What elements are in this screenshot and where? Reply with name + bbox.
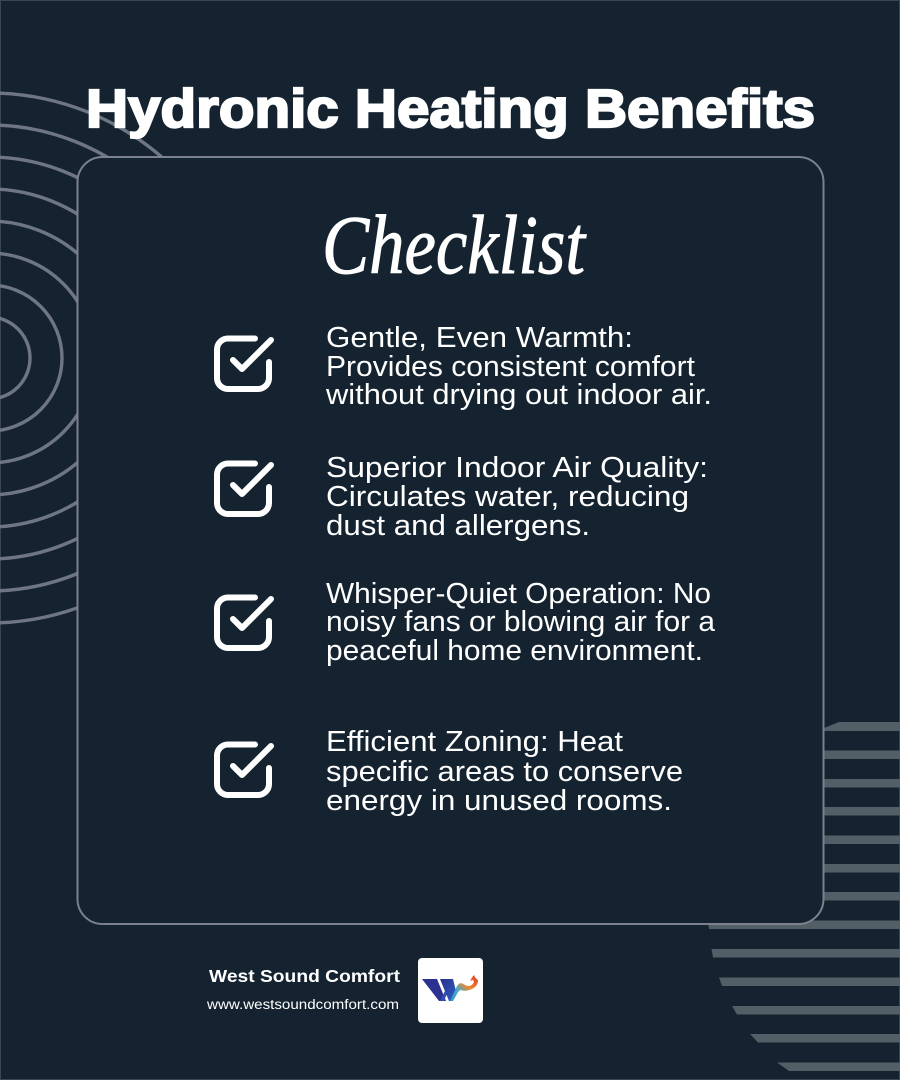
text: item 2: Circulates water, reducing — [326, 481, 689, 513]
footer: company name: West Sound Comfort — [209, 966, 400, 986]
icon: checkbox 4 — [217, 744, 271, 795]
text: item 1: Provides consistent comfort — [326, 351, 695, 383]
text: item 2: dust and allergens. — [326, 510, 590, 542]
text: item 3: Whisper-Quiet Operation: No — [326, 578, 711, 610]
item 1: gentle warmth — [217, 322, 712, 411]
text: item 4 — [326, 726, 683, 817]
icon: checkbox 3 — [217, 598, 271, 648]
icon: checkbox 1 — [217, 338, 271, 389]
text: item 2: Superior Indoor Air Quality: — [326, 452, 708, 484]
item 4: zoning — [217, 726, 683, 817]
text: item 2 — [326, 452, 708, 542]
title: Hydronic Heating Benefits — [86, 79, 815, 139]
text: item 1: Gentle, Even Warmth: — [326, 322, 633, 354]
checklist heading: Checklist — [322, 199, 587, 292]
icon: company logo — [418, 958, 483, 1023]
decorative stripes — [708, 722, 900, 1071]
icon: checkbox 2 — [217, 464, 271, 514]
text: item 4: energy in unused rooms. — [326, 785, 672, 817]
text: item 3: noisy fans or blowing air for a — [326, 606, 716, 638]
item 3: quiet operation — [217, 578, 716, 667]
decorative concentric arcs — [0, 93, 254, 623]
footer: website: www.westsoundcomfort.com — [206, 997, 399, 1012]
text: item 1: without drying out indoor air. — [325, 379, 712, 411]
text: item 3 — [326, 578, 716, 667]
text: item 4: Efficient Zoning: Heat — [326, 726, 623, 758]
text: item 3: peaceful home environment. — [326, 635, 703, 667]
item 2: air quality — [217, 452, 708, 542]
text: item 1 — [325, 322, 712, 411]
text: item 4: specific areas to conserve — [326, 756, 683, 788]
panel: checklist card — [78, 157, 824, 924]
